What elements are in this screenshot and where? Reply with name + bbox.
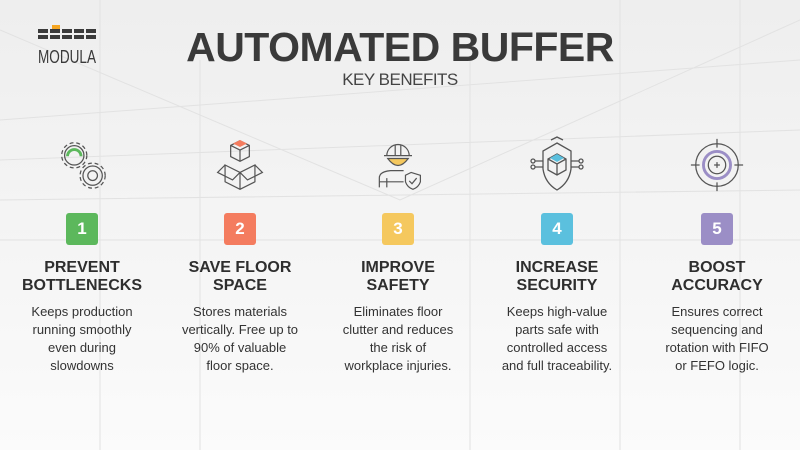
heading: BOTTLENECKS bbox=[22, 277, 142, 294]
panel: improve safety bbox=[343, 144, 453, 373]
subtitle: KEY BENEFITS bbox=[342, 70, 458, 89]
panel: boost accuracy: Ensures correct sequencing and rotation with FIFO or FEFO logic. bbox=[665, 304, 769, 373]
logo bbox=[38, 25, 96, 67]
heading bbox=[22, 259, 142, 294]
icon: worker bbox=[378, 144, 421, 190]
panel: increase security: SECURITY bbox=[517, 277, 597, 294]
title: AUTOMATED BUFFER bbox=[186, 24, 614, 70]
badge 1 bbox=[66, 213, 98, 245]
panel: increase security: Keeps high-value parts safe with controlled access and full traceability. bbox=[502, 304, 612, 373]
badge 4: 4 bbox=[552, 219, 562, 238]
badge 5: 5 bbox=[712, 219, 722, 238]
icon: target bbox=[690, 138, 744, 192]
icon: box bbox=[216, 140, 264, 190]
icon: gears bbox=[61, 142, 106, 189]
badge 1: 1 bbox=[77, 219, 87, 238]
panel: increase security bbox=[502, 136, 612, 373]
badge 4 bbox=[541, 213, 573, 245]
panel: improve safety: Eliminates floor clutter and reduces the risk of workplace injuries. bbox=[343, 304, 453, 373]
panel: save floor space: SPACE bbox=[213, 277, 267, 294]
panel: boost accuracy bbox=[665, 138, 769, 373]
panel: increase security: INCREASE bbox=[516, 259, 598, 276]
heading: PREVENT bbox=[44, 259, 120, 276]
panel: improve safety: SAFETY bbox=[366, 277, 430, 294]
panel: save floor space bbox=[182, 140, 298, 373]
panel: improve safety: IMPROVE bbox=[361, 259, 435, 276]
panel: save floor space: Stores materials vertically. Free up to 90% of valuable floor space. bbox=[182, 304, 298, 373]
badge 3: 3 bbox=[393, 219, 403, 238]
panel: prevent bottlenecks bbox=[22, 142, 142, 373]
badge 2: 2 bbox=[235, 219, 245, 238]
panel: save floor space: SAVE FLOOR bbox=[189, 259, 291, 276]
badge 5 bbox=[701, 213, 733, 245]
text: Keeps production running smoothly even during slowdowns bbox=[31, 304, 133, 373]
badge 2 bbox=[224, 213, 256, 245]
badge 3 bbox=[382, 213, 414, 245]
panel: boost accuracy: BOOST bbox=[689, 259, 745, 276]
icon: shield bbox=[530, 136, 584, 191]
panel: boost accuracy: ACCURACY bbox=[671, 277, 763, 294]
